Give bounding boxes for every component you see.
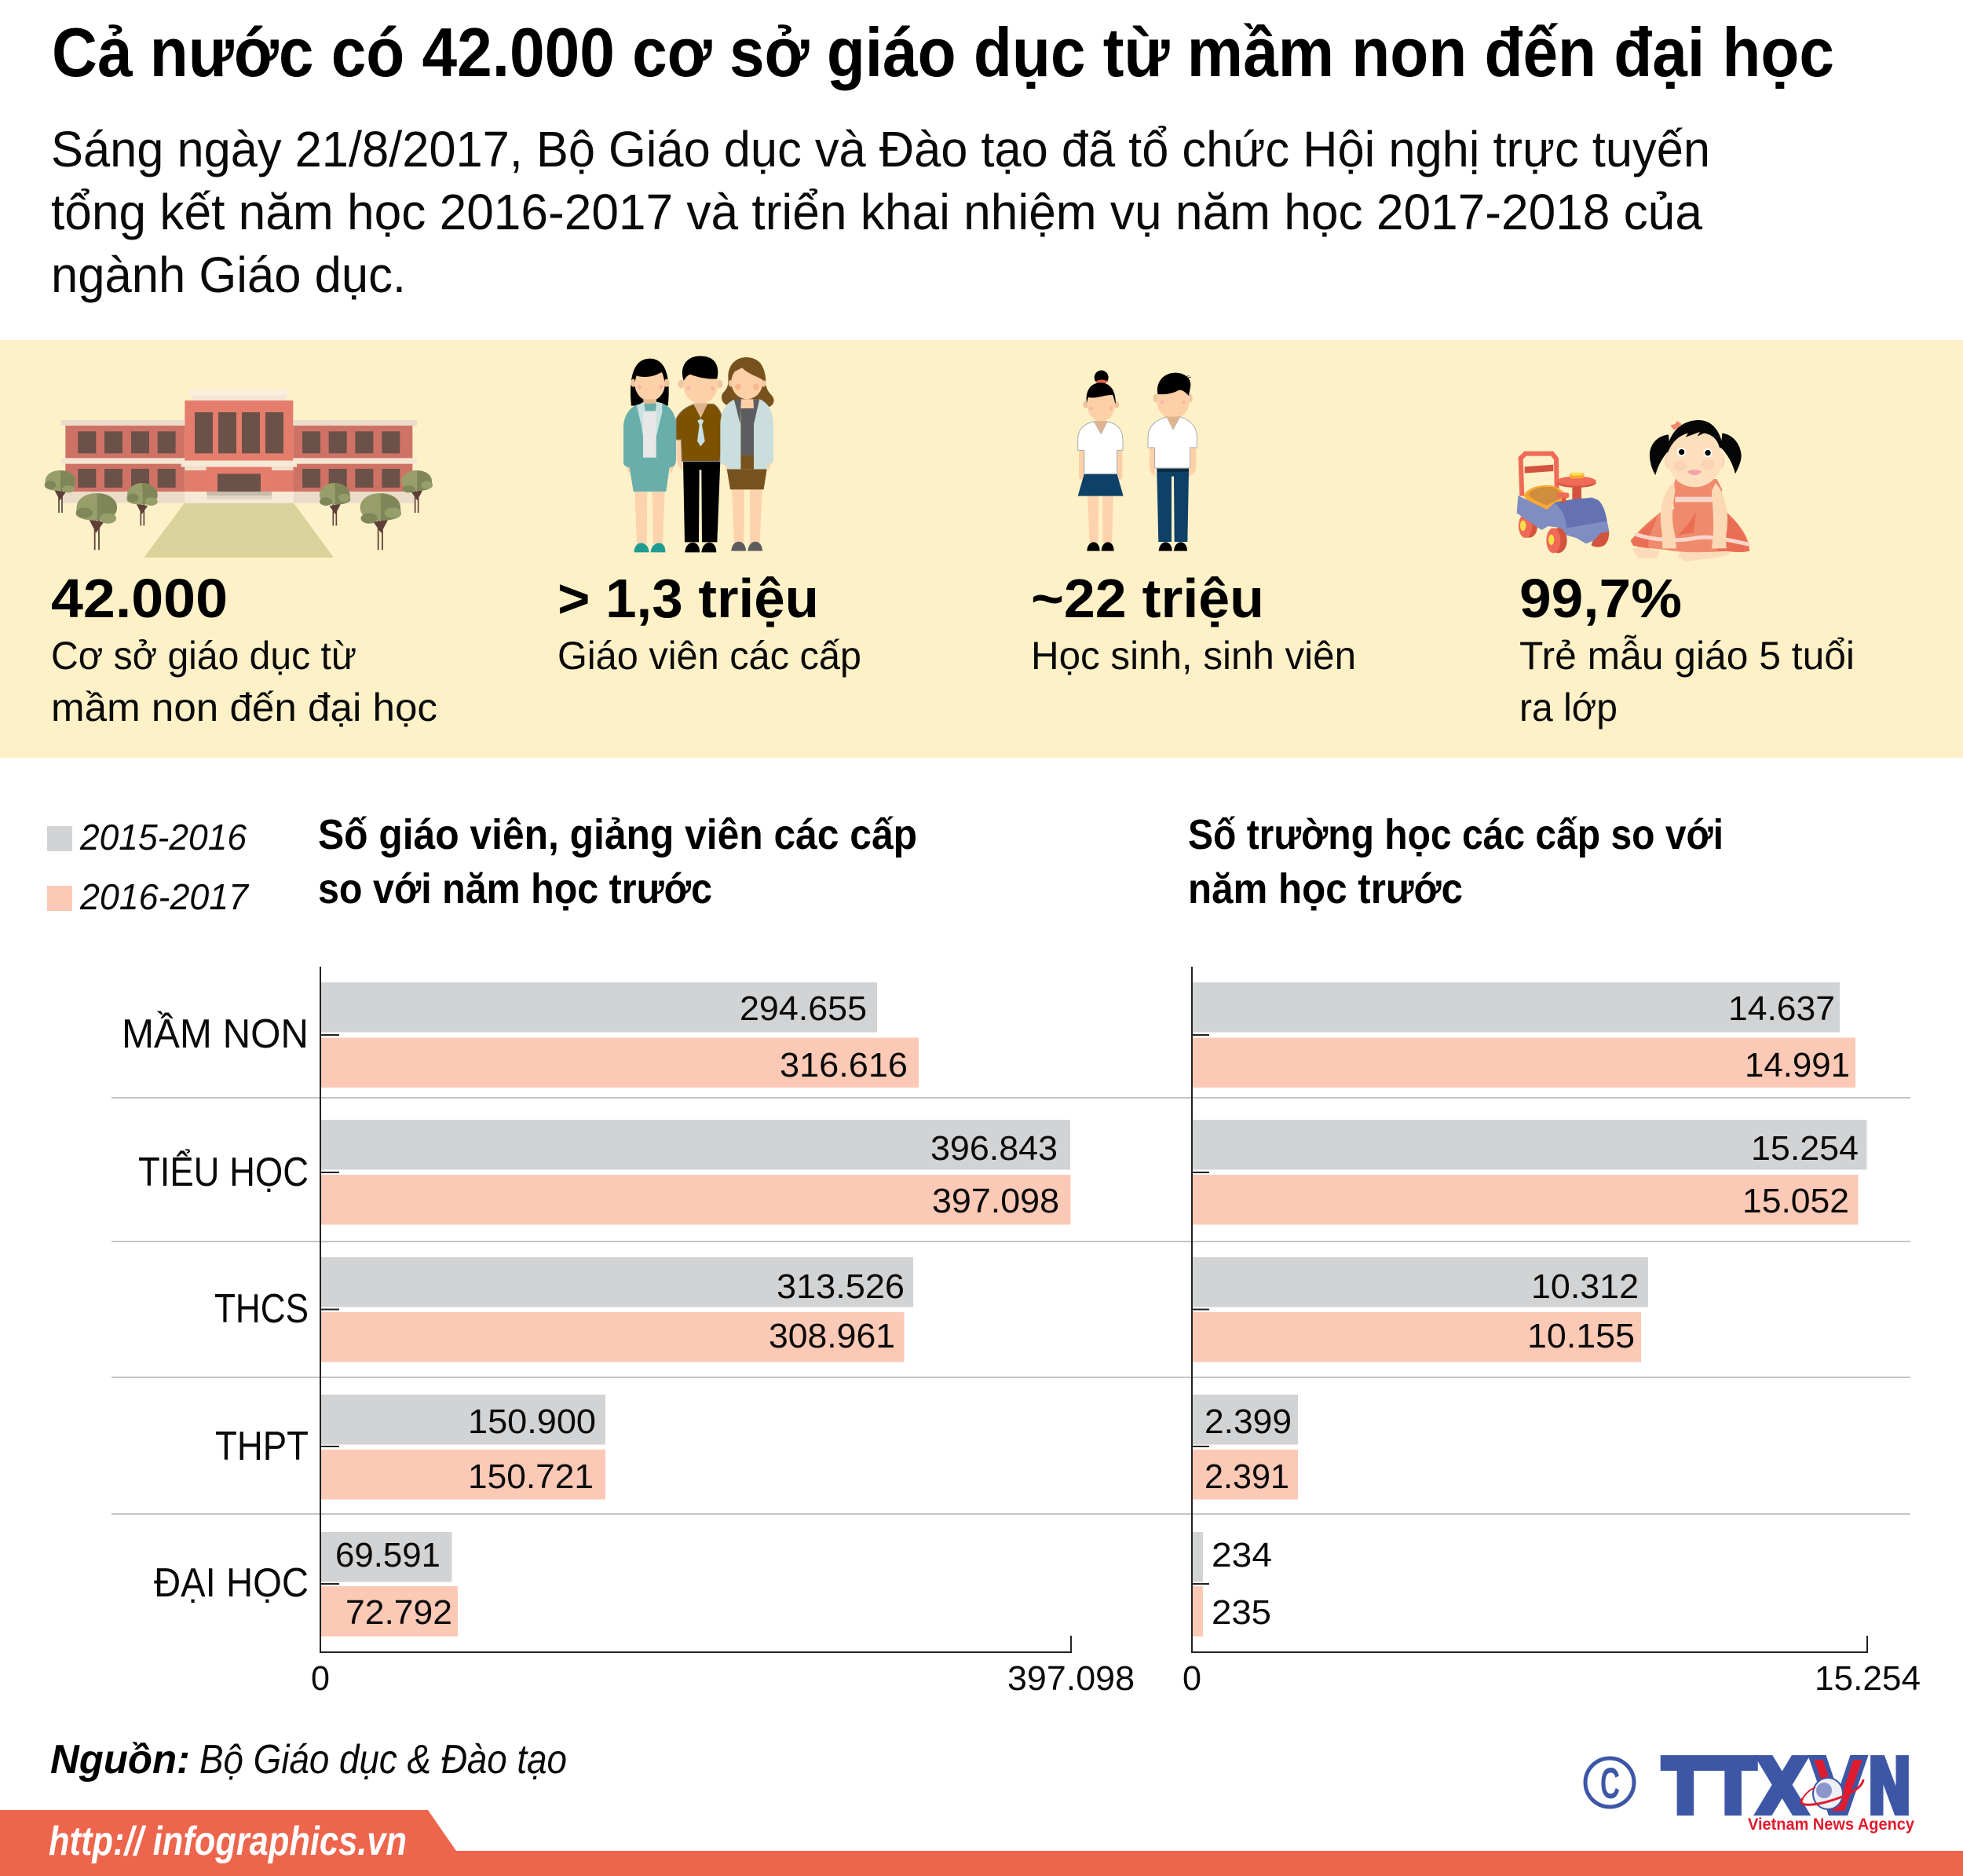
girl student [1078, 371, 1124, 551]
level labels [122, 1011, 309, 1606]
stat: 42.000 schools: 42.000 [51, 568, 228, 629]
website url: http:// infographics.vn [49, 1819, 407, 1864]
row separators [111, 1097, 1910, 1515]
intro text block: ngành Giáo dục. [51, 247, 406, 303]
legend: 2016-2017 [79, 876, 249, 917]
title: Cả nước có 42.000 cơ sở giáo dục từ mầm non đến đại học [52, 13, 1834, 91]
teachers bars: Tiểu học: 397.098 [932, 1182, 1059, 1220]
level labels: TIỂU HỌC [138, 1149, 309, 1195]
level labels: MẦM NON [122, 1011, 309, 1057]
toy car [1517, 454, 1609, 553]
teachers bars: Mầm non: 316.616 [780, 1046, 908, 1084]
stat: 1,3 million teachers: > 1,3 triệu [557, 568, 819, 629]
schools bars: Tiểu học: 15.052 [1742, 1182, 1849, 1220]
icon: three teachers [623, 356, 774, 552]
schools bars: THPT: 2.391 [1204, 1457, 1289, 1496]
stat: 22 million students: ~22 triệu [1031, 568, 1264, 629]
intro text block: tổng kết năm học 2016-2017 và triển khai nhiệm vụ năm học 2017-2018 của [51, 184, 1702, 240]
logo: TTXVN Vietnam News Agency: TTX [1662, 1743, 1808, 1831]
teachers bars: Đại học: 72.792 [345, 1593, 452, 1632]
legend: 2015-2016 [79, 817, 247, 858]
level labels: ĐẠI HỌC [154, 1560, 309, 1606]
schools bars: Tiểu học [1192, 1120, 1867, 1225]
intro text block [51, 121, 1710, 303]
stat: 99,7%: 99,7% [1519, 568, 1682, 629]
stat: 1,3 million teachers [557, 568, 861, 678]
boy student [1148, 373, 1197, 551]
bar chart: teachers [311, 967, 1135, 1698]
source: Bộ Giáo dục & Đào tạo [199, 1737, 567, 1783]
schools axis labels: 0 [1183, 1659, 1201, 1698]
teachers bars: THCS [320, 1257, 913, 1362]
stat: 22 million students [1031, 568, 1356, 678]
stat: 22 million students: Học sinh, sinh viên [1031, 634, 1356, 678]
bar chart: schools [1183, 967, 1921, 1698]
stat: 42.000 schools [51, 568, 437, 730]
logo: copyright mark [1585, 1758, 1634, 1808]
teachers bars: Tiểu học [320, 1120, 1071, 1225]
teachers bars: Đại học [320, 1532, 458, 1636]
schools bars: Mầm non: 14.991 [1745, 1046, 1850, 1084]
teachers bars: Tiểu học: 396.843 [930, 1129, 1058, 1168]
icon: two students [1078, 371, 1197, 551]
teachers bars: THCS: 308.961 [769, 1317, 895, 1355]
schools bars: Đại học: 235 [1212, 1593, 1271, 1632]
right woman [720, 357, 774, 551]
level labels: THPT [215, 1424, 309, 1469]
stat: 99,7%: ra lớp [1519, 686, 1618, 730]
schools bars: Đại học [1192, 1532, 1272, 1636]
schools axis labels: 15.254 [1815, 1659, 1921, 1698]
schools bars: Đại học: 234 [1212, 1536, 1272, 1574]
schools bars: THCS: 10.312 [1531, 1267, 1639, 1306]
schools axis labels [1183, 1659, 1921, 1698]
little girl [1631, 420, 1749, 561]
level labels: THCS [214, 1286, 309, 1332]
schools bars: THCS [1192, 1257, 1648, 1362]
teachers bars: Đại học: 69.591 [335, 1536, 440, 1574]
teachers axis labels [311, 1659, 1135, 1698]
teachers bars: THPT [320, 1395, 605, 1500]
heading: teachers chart: so với năm học trước [318, 865, 712, 912]
logo: TTXVN Vietnam News Agency: N [1867, 1743, 1912, 1831]
left woman [623, 359, 676, 552]
legend [47, 817, 249, 917]
schools bars: Mầm non [1192, 982, 1855, 1088]
heading: schools chart: năm học trước [1188, 865, 1463, 912]
icon: toy car and little girl [1517, 420, 1749, 561]
stat: 99,7% [1519, 568, 1855, 730]
stat: 42.000 schools: mầm non đến đại học [51, 686, 437, 730]
schools bars: Mầm non: 14.637 [1728, 989, 1835, 1028]
heading: schools chart: Số trường học các cấp so với [1188, 811, 1724, 858]
logo: TTXVN Vietnam News Agency [1662, 1743, 1914, 1834]
intro text block: Sáng ngày 21/8/2017, Bộ Giáo dục và Đào tạo đã tổ chức Hội nghị trực tuyến [51, 121, 1710, 177]
heading: teachers chart [318, 811, 917, 912]
teachers axes [320, 967, 1071, 1652]
teachers bars: THCS: 313.526 [777, 1267, 905, 1306]
logo: TTXVN Vietnam News Agency: V [1811, 1743, 1866, 1831]
logo: TTXVN Vietnam News Agency: Vietnam News Agency [1748, 1816, 1914, 1834]
source [50, 1737, 567, 1783]
schools bars: THPT [1192, 1395, 1298, 1500]
teachers bars: Mầm non: 294.655 [740, 989, 867, 1028]
schools bars: THPT: 2.399 [1204, 1402, 1292, 1441]
teachers bars: Mầm non [320, 982, 919, 1088]
teachers axis labels: 0 [311, 1659, 330, 1698]
footer band [0, 1810, 1963, 1876]
trees [45, 470, 433, 550]
teachers bars: THPT: 150.900 [468, 1402, 596, 1441]
schools axes [1192, 967, 1867, 1652]
schools bars: THCS: 10.155 [1527, 1317, 1635, 1355]
teachers axis labels: 397.098 [1007, 1659, 1135, 1698]
stat: 42.000 schools: Cơ sở giáo dục từ [51, 634, 356, 678]
logo: copyright mark: C [1600, 1758, 1620, 1808]
teachers bars: THPT: 150.721 [468, 1457, 594, 1496]
stat: 99,7%: Trẻ mẫu giáo 5 tuổi [1519, 634, 1855, 678]
icon: school building [45, 389, 433, 558]
panel: key figures band [0, 340, 1963, 758]
stat: 1,3 million teachers: Giáo viên các cấp [557, 634, 861, 678]
heading: schools chart [1188, 811, 1724, 912]
man [676, 356, 722, 552]
schools bars: Tiểu học: 15.254 [1751, 1129, 1859, 1168]
source: Nguồn: [50, 1737, 190, 1783]
heading: teachers chart: Số giáo viên, giảng viên các cấp [318, 811, 917, 858]
